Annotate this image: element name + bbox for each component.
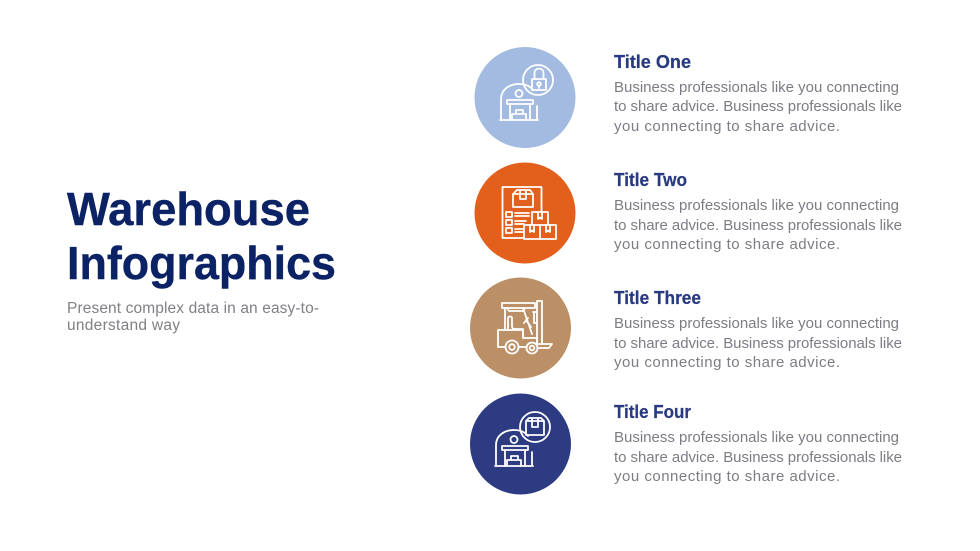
text: title two: you connecting to share advice.	[614, 236, 840, 253]
text: title three	[614, 288, 902, 371]
circle: item two	[474, 162, 576, 264]
text: title four: to share advice. Business professionals like	[614, 449, 902, 466]
circle: item three	[470, 278, 571, 378]
title: Warehouse	[67, 183, 310, 235]
text: title four: Business professionals like you connecting	[614, 429, 899, 446]
text: title three: to share advice. Business professionals like	[614, 335, 902, 352]
text: title four: you connecting to share advice.	[614, 468, 840, 485]
text: title one	[614, 52, 902, 135]
circle: item one	[474, 47, 576, 148]
text: title three: you connecting to share advice.	[614, 354, 840, 371]
text: title two: to share advice. Business professionals like	[614, 217, 902, 234]
icon: warehouse with padlock	[500, 65, 553, 120]
subtitle: Present complex data in an easy-to-	[67, 300, 319, 317]
subtitle	[67, 300, 319, 334]
icon: forklift	[498, 301, 552, 354]
title: Infographics	[67, 237, 336, 289]
text: title one: Business professionals like you connecting	[614, 79, 899, 96]
text: title three: Business professionals like you connecting	[614, 315, 899, 332]
text: title four: Title Four	[614, 402, 691, 422]
icon: inventory list and boxes	[502, 187, 556, 239]
text: title one: Title One	[614, 52, 691, 72]
circle: item four	[470, 394, 571, 494]
text: title two	[614, 170, 902, 253]
text: title two: Title Two	[614, 170, 687, 190]
text: title two: Business professionals like you connecting	[614, 197, 899, 214]
subtitle: understand way	[67, 317, 180, 334]
text: title one: you connecting to share advice.	[614, 118, 840, 135]
text: title four	[614, 402, 902, 485]
icon: warehouse with box	[495, 412, 550, 466]
title	[67, 183, 336, 289]
text: title one: to share advice. Business professionals like	[614, 98, 902, 115]
text: title three: Title Three	[614, 288, 701, 308]
